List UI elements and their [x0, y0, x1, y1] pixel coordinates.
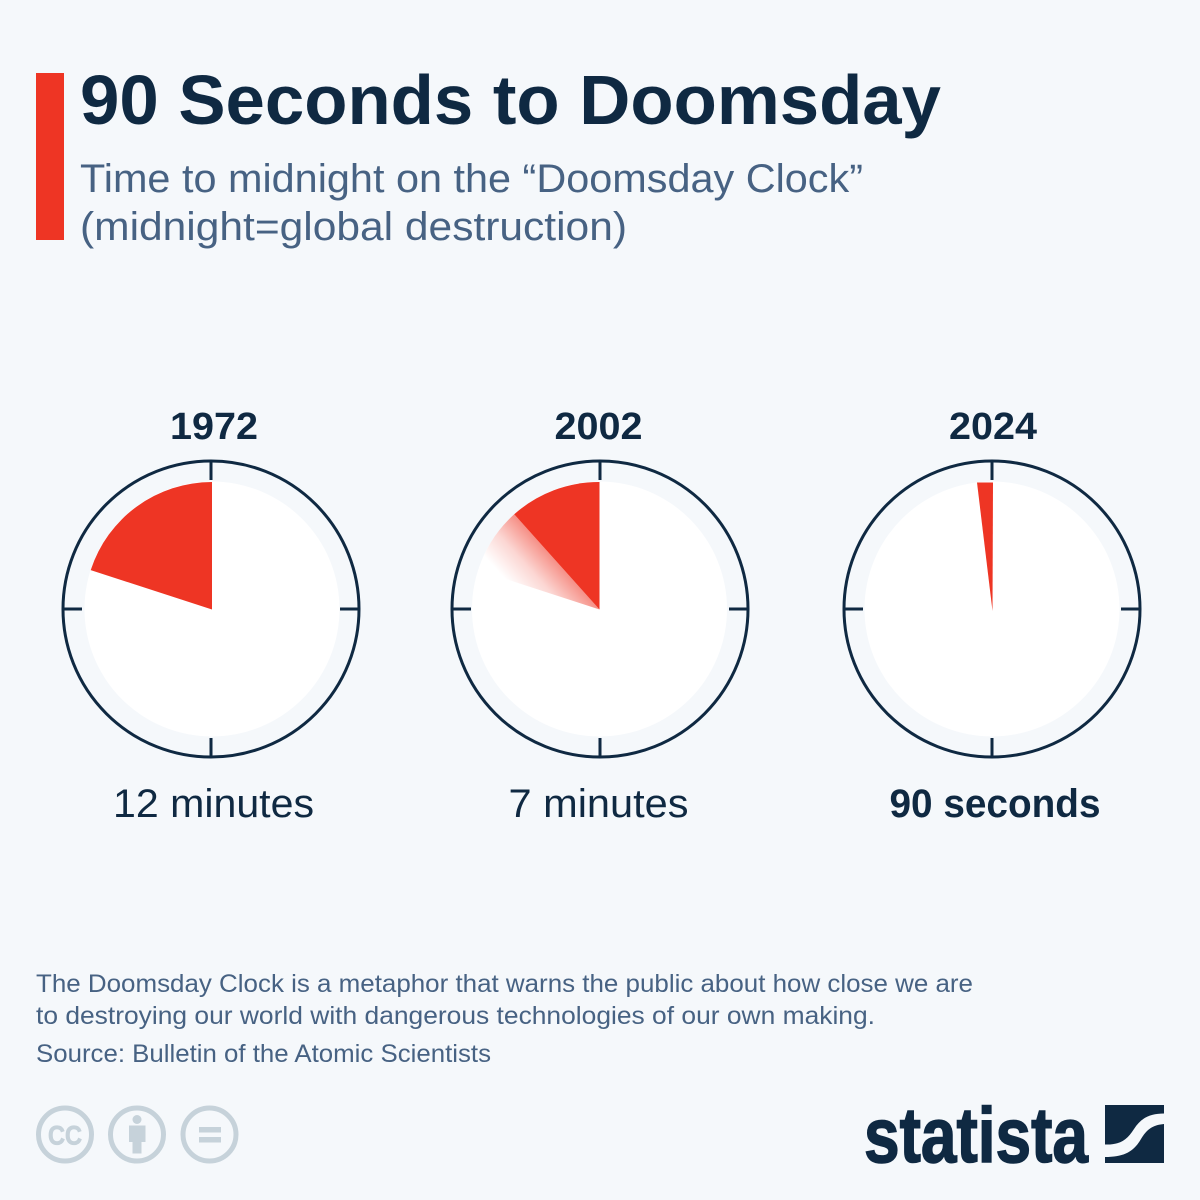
icon: creative commons: CC	[48, 1120, 82, 1150]
wedge: 7 minutes	[514, 482, 600, 610]
description note	[36, 970, 973, 1030]
clock panel: 2002	[452, 406, 748, 826]
year label 1972: 1972	[170, 406, 258, 448]
logo mark	[1105, 1105, 1164, 1145]
clock panel: 2024	[844, 406, 1140, 826]
wedge: 12 minutes	[91, 482, 212, 610]
icon: attribution	[110, 1108, 164, 1161]
year label 2002: 2002	[554, 406, 642, 448]
clock face 2002	[452, 461, 748, 757]
description note: The Doomsday Clock is a metaphor that warns the public about how close we are	[36, 970, 973, 998]
icon: creative commons	[38, 1108, 92, 1161]
clock panel: 1972	[63, 406, 359, 826]
clock face 1972	[63, 461, 359, 757]
logo wordmark: statista	[864, 1091, 1088, 1179]
fading wedge: previous position	[478, 514, 600, 610]
statista logo	[864, 1091, 1164, 1179]
title: 90 Seconds to Doomsday	[80, 61, 941, 139]
description note: to destroying our world with dangerous technologies of our own making.	[36, 1002, 875, 1030]
year label 2024: 2024	[949, 406, 1037, 448]
accent bar	[36, 73, 64, 240]
wedge: 90 seconds	[977, 482, 993, 611]
icon: no derivatives	[183, 1108, 236, 1161]
clock face 2024	[844, 461, 1140, 757]
duration label 7 minutes: 7 minutes	[508, 782, 688, 826]
source: Source: Bulletin of the Atomic Scientists	[36, 1040, 491, 1068]
duration label 12 minutes: 12 minutes	[113, 782, 314, 826]
subtitle: Time to midnight on the “Doomsday Clock”	[80, 157, 863, 201]
subtitle	[80, 157, 863, 249]
duration label 90 seconds: 90 seconds	[890, 782, 1100, 826]
subtitle: (midnight=global destruction)	[80, 205, 627, 249]
